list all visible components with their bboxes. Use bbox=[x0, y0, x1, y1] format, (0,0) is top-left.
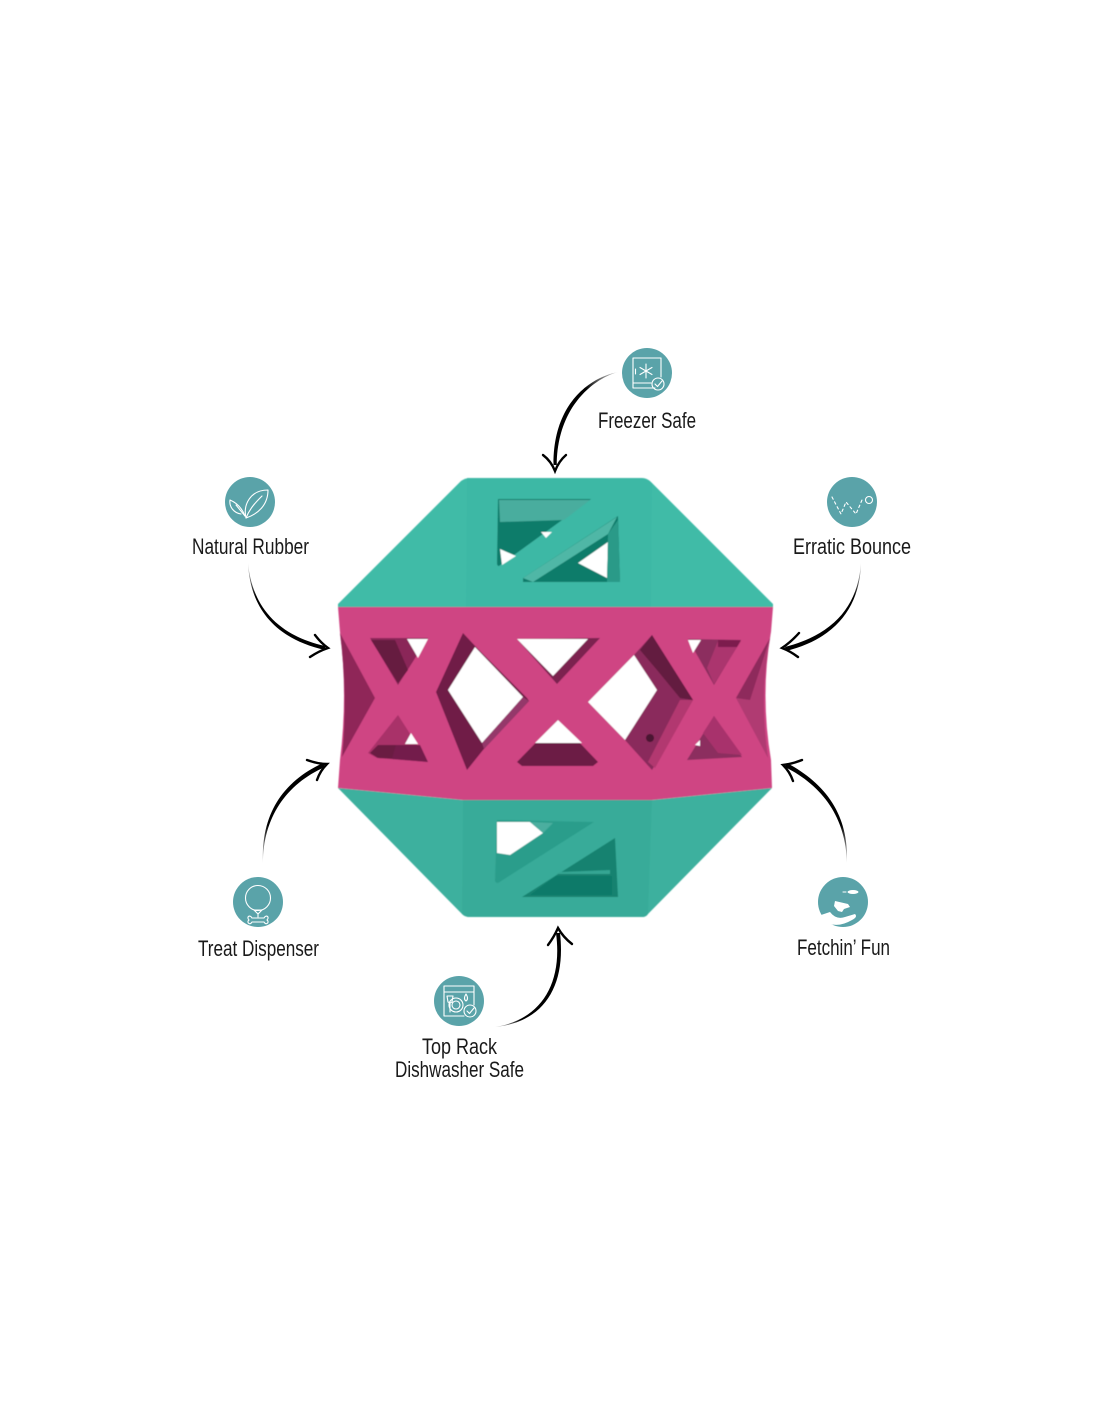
arrow: fetching fun to ball bbox=[783, 760, 847, 863]
arrow: natural rubber to ball bbox=[248, 563, 328, 657]
bottom window: lower opening bbox=[522, 838, 618, 897]
feature: erratic bounce bbox=[793, 477, 911, 559]
left diamond opening bbox=[436, 633, 529, 770]
arrow: erratic bounce to ball bbox=[782, 563, 861, 657]
feature: fetchin fun bbox=[797, 877, 890, 960]
icon: dog catching disc bbox=[818, 877, 868, 927]
ball pink centre band bbox=[338, 607, 773, 800]
feature: treat dispenser bbox=[198, 877, 319, 961]
right wedge opening bbox=[736, 638, 770, 758]
label: treat dispenser: Treat Dispenser bbox=[198, 936, 319, 961]
arrow: freezer safe to ball bbox=[543, 372, 618, 471]
icon: bouncing ball path bbox=[827, 477, 877, 527]
arrow: dishwasher safe to ball bbox=[495, 928, 572, 1027]
label: erratic bounce: Erratic Bounce bbox=[793, 534, 911, 559]
centre lower triangle opening bbox=[517, 720, 598, 766]
top window: upper opening bbox=[497, 499, 591, 566]
label: top rack dishwasher safe: Top Rack bbox=[422, 1034, 498, 1059]
top window: lower opening bbox=[523, 516, 620, 582]
feature: top rack dishwasher safe bbox=[395, 976, 524, 1082]
right diamond opening bbox=[588, 635, 693, 770]
upper right triangle opening bbox=[688, 639, 741, 685]
feature: freezer safe bbox=[598, 348, 696, 433]
bottom window: upper opening bbox=[495, 820, 594, 883]
ball top teal section bbox=[338, 478, 773, 607]
centre upper triangle opening bbox=[517, 638, 600, 684]
product: rubber treat ball bbox=[338, 478, 773, 917]
ball bottom teal section bbox=[338, 788, 772, 917]
label: freezer safe: Freezer Safe bbox=[598, 408, 696, 433]
lower right triangle opening bbox=[687, 716, 742, 760]
lower left triangle opening bbox=[368, 715, 428, 762]
icon: freezer with snowflake bbox=[622, 348, 672, 398]
label: fetchin fun: Fetchin’ Fun bbox=[797, 935, 890, 960]
label: top rack dishwasher safe: Dishwasher Safe bbox=[395, 1057, 524, 1082]
label: natural rubber: Natural Rubber bbox=[192, 534, 309, 559]
icon: ring and bone bbox=[233, 877, 283, 927]
icon: leaves bbox=[225, 477, 275, 527]
icon: dishwasher bbox=[434, 976, 484, 1026]
left wedge opening bbox=[340, 633, 375, 757]
arrow: treat dispenser to ball bbox=[263, 760, 327, 863]
feature: natural rubber bbox=[192, 477, 309, 559]
upper left triangle opening bbox=[370, 638, 428, 685]
